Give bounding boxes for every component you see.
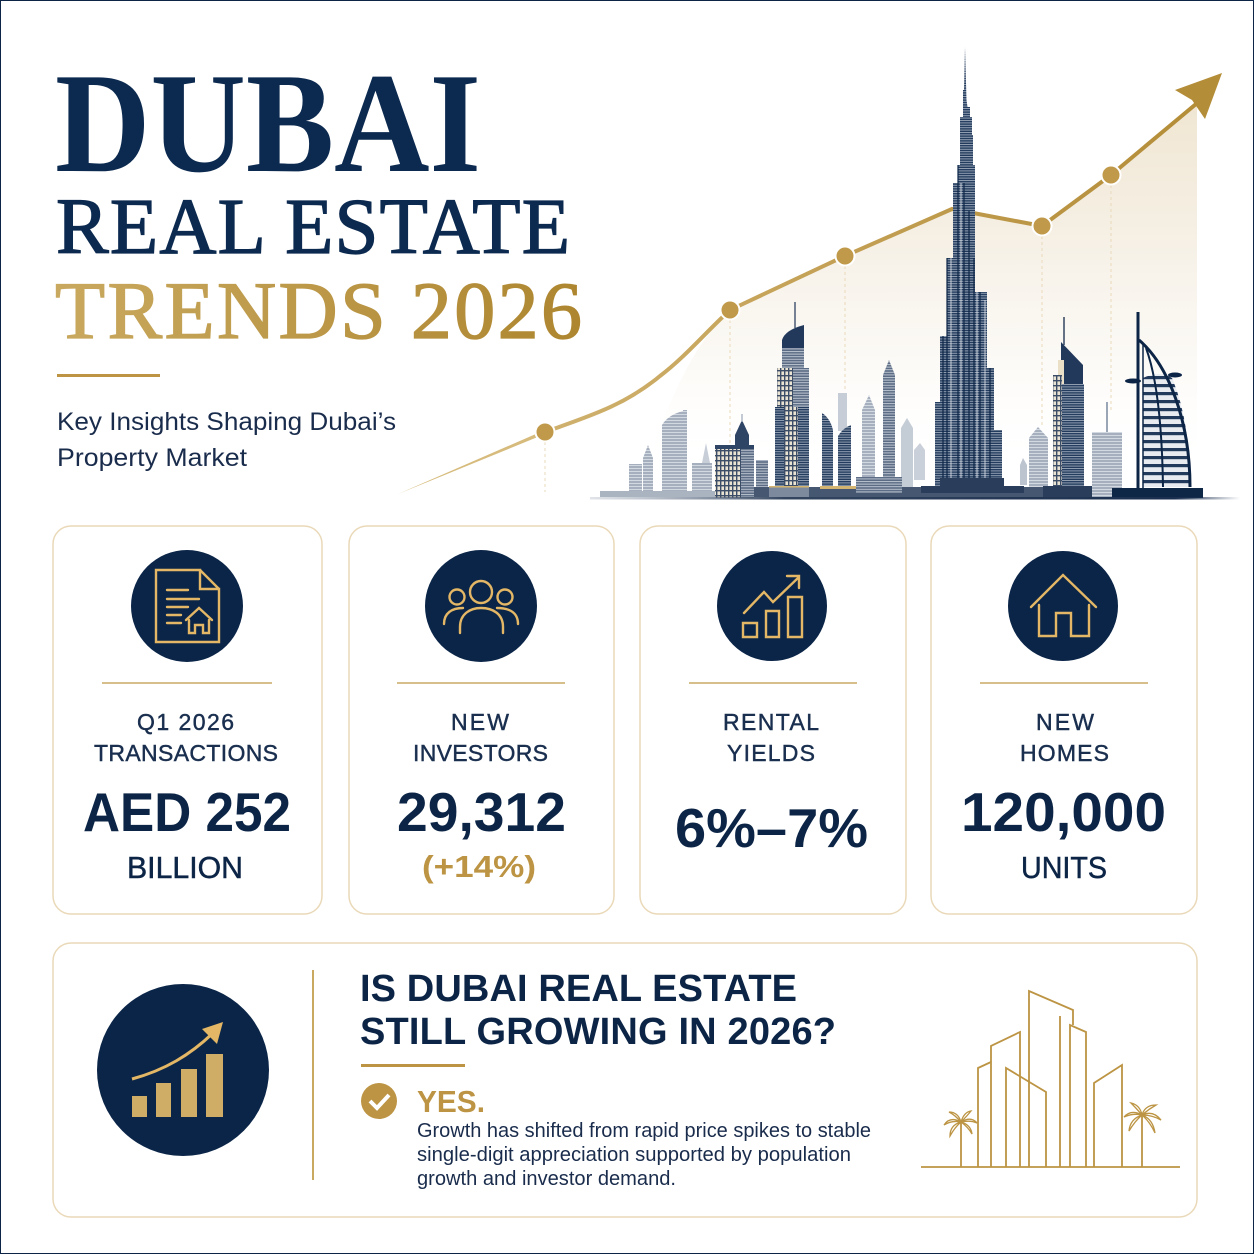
answer text [417, 1120, 871, 1190]
low base band [754, 487, 1114, 497]
value: AED 252 billion [83, 781, 291, 885]
value: 6%–7%: 6%–7% [675, 797, 868, 859]
icon: growth bars [97, 984, 269, 1156]
chart points [536, 166, 1120, 442]
chart area fill [640, 105, 1197, 480]
value: 29,312 +14%: 29,312 [397, 781, 566, 843]
growth chart [398, 73, 1222, 494]
icon: check [361, 1083, 397, 1119]
label: new investors [413, 709, 548, 766]
value: 29,312 +14% [397, 781, 566, 884]
far left buildings [600, 410, 768, 497]
panel: rental yields [640, 526, 906, 914]
gold-detail mid-rise [715, 414, 754, 498]
question heading [360, 968, 836, 1053]
right towers [1020, 317, 1122, 497]
value: 120,000 units: 120,000 [961, 781, 1166, 843]
label: rental yields: YIELDS [727, 740, 815, 766]
icon: house [1008, 551, 1118, 661]
answer: yes: YES. [417, 1084, 485, 1119]
question heading: IS DUBAI REAL ESTATE [360, 968, 797, 1010]
label: new homes: NEW [1036, 709, 1094, 735]
Burj Al Arab [1112, 312, 1203, 498]
label: new investors: NEW [451, 709, 509, 735]
title [55, 44, 582, 356]
chart tapered line start [398, 430, 545, 494]
icon: people [425, 550, 537, 662]
value: 120,000 units [961, 781, 1166, 885]
panel: new investors [349, 526, 614, 914]
Burj Khalifa [921, 47, 1024, 493]
panel: transactions [53, 526, 322, 914]
answer text: growth and investor demand. [417, 1168, 676, 1190]
value: 29,312 +14%: (+14%) [422, 849, 536, 884]
label: new homes: HOMES [1020, 740, 1109, 766]
label: rental yields: RENTAL [723, 709, 819, 735]
chart dashed drop lines [545, 185, 1111, 492]
chart arrow head [1175, 73, 1222, 119]
label: new homes [1020, 709, 1109, 766]
title line: DUBAI: DUBAI [55, 44, 481, 202]
question heading: STILL GROWING IN 2026? [360, 1011, 836, 1053]
icon: rising bars [717, 551, 827, 661]
title line: TRENDS 2026: TRENDS 2026 [55, 265, 582, 356]
chart trend line [545, 104, 1196, 432]
subtitle: Key Insights Shaping Dubai’s [57, 408, 396, 436]
label: Q1 2026 transactions: Q1 2026 [137, 709, 234, 735]
answer text: Growth has shifted from rapid price spikes to stable [417, 1120, 871, 1142]
tall tower with crown [769, 302, 809, 497]
central slim towers [820, 360, 925, 493]
value: AED 252 billion: AED 252 [83, 781, 291, 843]
icon: document with house [131, 550, 243, 662]
label: Q1 2026 transactions: TRANSACTIONS [94, 740, 278, 766]
subtitle [57, 408, 396, 472]
label: new investors: INVESTORS [413, 740, 548, 766]
skyline [590, 47, 1240, 500]
panel: new homes [931, 526, 1197, 914]
value: 120,000 units: UNITS [1021, 850, 1107, 885]
ground line [590, 497, 1240, 500]
subtitle: Property Market [57, 444, 247, 472]
panel: still growing [53, 943, 1197, 1217]
value: AED 252 billion: BILLION [127, 850, 243, 885]
label: rental yields [723, 709, 819, 766]
icon: line-art buildings and palms [921, 991, 1180, 1167]
answer text: single-digit appreciation supported by population [417, 1144, 851, 1166]
title line: REAL ESTATE: REAL ESTATE [56, 184, 570, 271]
label: Q1 2026 transactions [94, 709, 278, 766]
